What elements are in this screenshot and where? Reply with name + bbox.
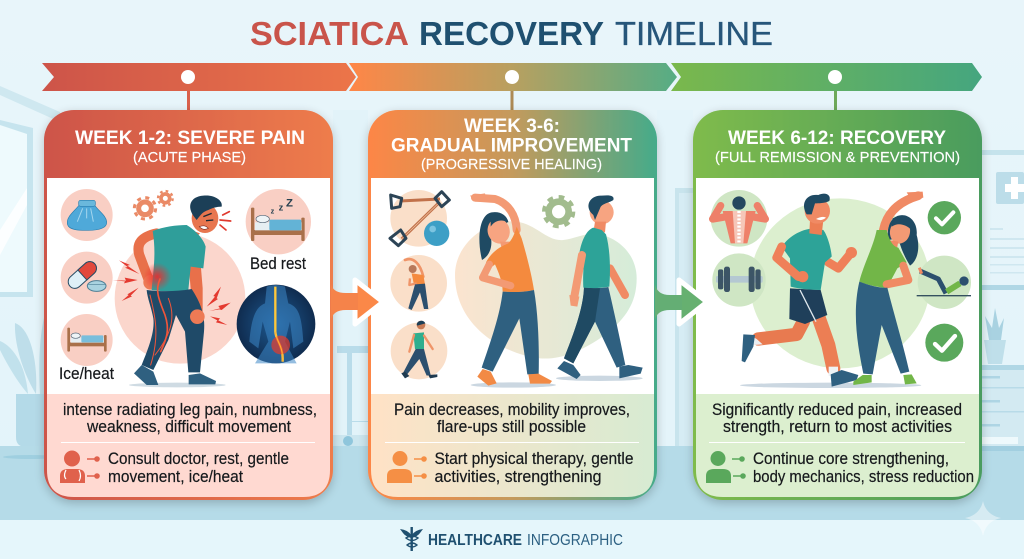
footer logo	[400, 527, 623, 551]
arrow shaft: week 3-6 to week 6-12	[655, 284, 682, 320]
panel: week 1-2 severe pain	[44, 110, 333, 500]
window	[0, 86, 60, 297]
icon: gear	[544, 197, 573, 226]
heading: week 3-6: GRADUAL IMPROVEMENT	[391, 136, 632, 156]
footer logo: HEALTHCARE	[428, 532, 522, 549]
arrow shaft: week 1-2 to week 3-6	[331, 284, 358, 320]
symptoms text	[394, 401, 630, 436]
heading: week 3-6	[391, 116, 632, 173]
footer logo: INFOGRAPHIC	[527, 532, 623, 549]
icon: check	[925, 324, 963, 362]
heading: week 6-12: WEEK 6-12: RECOVERY	[728, 128, 946, 149]
icon: spine x-ray	[237, 285, 315, 363]
symptoms text: weakness, difficult movement	[86, 418, 291, 436]
icon: dumbbell	[712, 253, 766, 307]
icon: sit-up	[917, 256, 971, 309]
icon: bed rest: z	[271, 207, 275, 216]
icon: pills	[61, 252, 113, 304]
action text: activities, strengthening	[434, 468, 602, 486]
title: SCIATICA	[250, 15, 409, 52]
illustration: man in pain with treatment icons	[61, 189, 315, 387]
symptoms text: flare-ups still possible	[437, 418, 586, 436]
man walking	[557, 195, 643, 379]
heading: week 3-6: (PROGRESSIVE HEALING)	[421, 156, 602, 173]
icon: mini walking figure	[391, 321, 447, 379]
action text	[108, 450, 289, 486]
man in pain	[134, 195, 231, 385]
symptoms text	[712, 401, 962, 436]
label: bed rest: Bed rest	[250, 255, 306, 273]
sparkle	[965, 501, 1001, 536]
symptoms text: strength, return to most activities	[723, 418, 952, 436]
icon: strong back	[711, 190, 767, 247]
lightning bolts	[113, 260, 231, 325]
clinic wall right	[982, 150, 1024, 451]
shadow	[740, 383, 921, 388]
action text: Continue core strengthening,	[753, 450, 949, 468]
man running	[742, 194, 858, 387]
illustration: stretching and walking	[390, 190, 643, 388]
plant left	[0, 310, 46, 447]
symptoms text	[63, 401, 317, 436]
arrow head: week 3-6 to week 6-12	[679, 280, 707, 324]
action text: Consult doctor, rest, gentle	[108, 450, 289, 468]
icon: resistance band and ball	[390, 190, 449, 247]
centre furniture	[333, 110, 693, 446]
title	[250, 15, 773, 52]
panel: week 3-6 gradual improvement	[368, 110, 657, 500]
illustration: running and stretching	[711, 190, 971, 388]
woman stretching	[853, 192, 923, 385]
icon: check	[928, 201, 961, 234]
heading: week 1-2	[75, 128, 305, 166]
symptoms text: Pain decreases, mobility improves,	[394, 401, 630, 419]
title: TIMELINE	[615, 15, 773, 52]
shadows	[471, 382, 556, 388]
symptoms text: Significantly reduced pain, increased	[712, 401, 962, 419]
heading: week 3-6: WEEK 3-6:	[464, 116, 560, 137]
icon: bed rest: z	[279, 202, 284, 212]
title: RECOVERY	[419, 15, 604, 52]
panel: week 6-12 recovery	[693, 110, 982, 500]
floor	[0, 446, 1024, 520]
icon: ice bag	[61, 189, 113, 241]
action text	[434, 450, 634, 486]
icon: person	[706, 451, 746, 483]
icon: bed rest: Z	[286, 197, 293, 209]
action text: body mechanics, stress reduction	[753, 468, 974, 486]
backdrop blob	[455, 221, 637, 359]
woman stretching	[470, 193, 552, 386]
icon: small bed	[61, 314, 113, 366]
icon: caduceus	[400, 527, 423, 551]
action text: movement, ice/heat	[108, 468, 243, 486]
heading: week 1-2: (ACUTE PHASE)	[133, 149, 246, 166]
icon: doctor	[60, 450, 100, 483]
heading: week 1-2: WEEK 1-2: SEVERE PAIN	[75, 128, 305, 149]
shadow	[129, 383, 226, 387]
arrow head: week 1-2 to week 3-6	[355, 280, 383, 324]
icon: bed rest	[246, 189, 311, 254]
icon: mini stretch figure	[390, 255, 447, 312]
icon: gears	[134, 191, 173, 219]
action text	[753, 450, 974, 486]
action text: Start physical therapy, gentle	[434, 450, 634, 468]
timeline banner	[42, 63, 982, 111]
label: ice/heat: Ice/heat	[59, 365, 114, 383]
icon: patient	[387, 451, 427, 483]
heading: week 6-12: (FULL REMISSION & PREVENTION)	[715, 149, 960, 166]
symptoms text: intense radiating leg pain, numbness,	[63, 401, 317, 419]
heading: week 6-12	[715, 128, 960, 166]
